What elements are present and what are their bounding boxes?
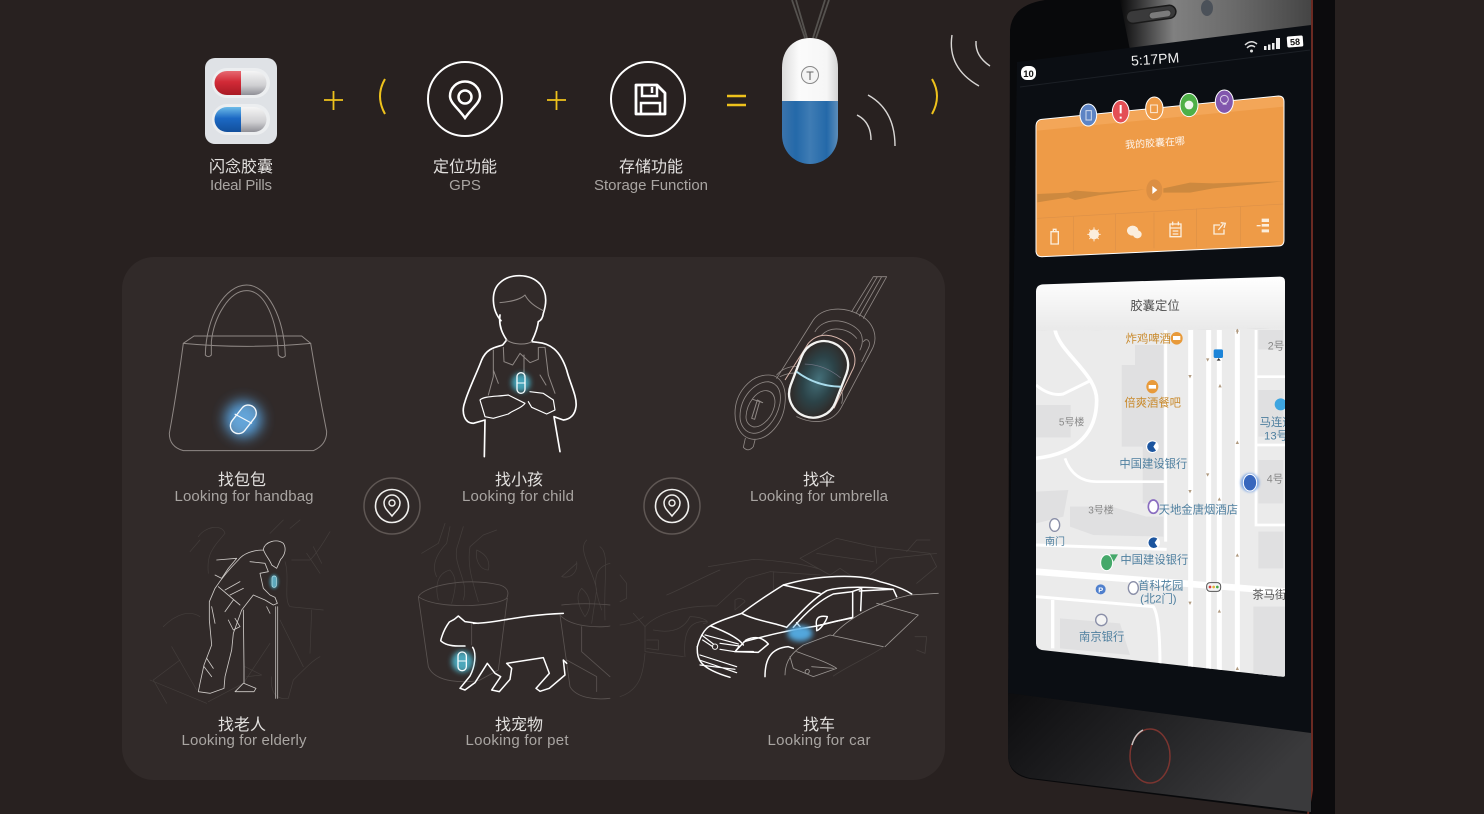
label: umbrella: 找伞 — [803, 471, 835, 489]
map base — [1036, 328, 1294, 678]
label: car: Looking for car — [768, 732, 870, 749]
map labels: 13号 — [1264, 429, 1288, 442]
icon: GPS circle — [428, 62, 502, 136]
label: GPS: GPS — [449, 177, 481, 194]
label: GPS: 定位功能 — [433, 158, 497, 176]
illustration: cat — [418, 523, 610, 699]
label: handbag: Looking for handbag — [174, 488, 314, 505]
label: handbag — [174, 471, 314, 505]
phone — [1008, 0, 1335, 814]
app card: capsule map — [1036, 277, 1294, 678]
label: child — [462, 471, 574, 505]
label: storage function — [594, 158, 708, 194]
map labels: 3号楼 — [1088, 503, 1114, 516]
location pin badge 2 — [644, 478, 700, 534]
map pins — [1050, 332, 1287, 626]
label: ideal pills — [209, 157, 273, 194]
label: pet: Looking for pet — [466, 732, 569, 749]
label: storage function: 存储功能 — [619, 158, 683, 176]
map labels: 倍爽酒餐吧 — [1124, 396, 1181, 410]
card heading: 我的胶囊在哪 — [1125, 134, 1185, 151]
status bar — [1020, 35, 1310, 87]
label: elderly: 找老人 — [218, 716, 266, 734]
label: car — [768, 716, 870, 749]
status bar: 5:17PM — [1130, 49, 1180, 69]
label: pet — [466, 716, 569, 749]
plus sign 2 — [547, 91, 566, 110]
status bar: 58 — [1290, 37, 1300, 47]
map labels: 茶马街 — [1252, 587, 1286, 601]
label: ideal pills: Ideal Pills — [210, 177, 272, 194]
bezel highlight — [1120, 0, 1311, 50]
app card: orange voice note — [1036, 90, 1284, 257]
map labels: 5号楼 — [1059, 416, 1084, 429]
label: handbag: 找包包 — [218, 471, 266, 489]
speaker and camera — [1125, 0, 1213, 24]
label: ideal pills: 闪念胶囊 — [209, 157, 273, 176]
signal waves upper — [951, 35, 990, 86]
phone side edge — [1308, 0, 1335, 814]
illustration: handbag — [169, 285, 327, 451]
label: umbrella: Looking for umbrella — [750, 488, 889, 505]
illustration: car — [620, 538, 938, 697]
label: elderly — [182, 716, 307, 749]
map labels: 4号 — [1267, 474, 1283, 486]
home button chin — [1008, 693, 1311, 812]
label: umbrella — [750, 471, 889, 505]
signal waves right — [857, 95, 895, 146]
home button — [1130, 729, 1170, 783]
map labels: 南门 — [1045, 535, 1065, 548]
location pin badge 1 — [364, 478, 420, 534]
label: GPS — [433, 158, 497, 194]
status bar: 10 — [1023, 69, 1034, 80]
map labels: 南京银行 — [1079, 630, 1124, 644]
label: elderly: Looking for elderly — [182, 732, 307, 749]
map labels: 中国建设银行 — [1120, 552, 1188, 566]
action icons — [1051, 219, 1269, 244]
play button — [1146, 179, 1162, 201]
map pins: P — [1098, 585, 1103, 594]
waveform — [1037, 181, 1283, 202]
plus sign 1 — [324, 91, 343, 110]
map header — [1036, 277, 1285, 331]
label: child: 找小孩 — [495, 471, 543, 489]
map labels: 中国建设银行 — [1119, 456, 1187, 470]
illustration: umbrella capsule — [735, 277, 887, 450]
label: car: 找车 — [803, 716, 835, 734]
device: capsule with cord — [782, 0, 838, 164]
formula row — [205, 0, 990, 194]
category bubbles — [1080, 90, 1233, 126]
map labels — [1045, 332, 1294, 644]
map labels: 天地金唐烟酒店 — [1159, 502, 1238, 516]
map labels: 炸鸡啤酒 — [1126, 332, 1171, 346]
map labels: 马连道 — [1260, 415, 1294, 429]
label: child: Looking for child — [462, 488, 574, 505]
panel: use cases — [122, 257, 945, 780]
current location marker — [1241, 473, 1259, 492]
icon: storage circle — [611, 62, 685, 136]
app card: capsule map: 胶囊定位 — [1130, 298, 1180, 313]
illustration: child — [463, 276, 576, 457]
phone body — [1008, 0, 1335, 814]
opening parenthesis — [380, 79, 385, 114]
label: storage function: Storage Function — [594, 177, 708, 194]
roads — [1036, 330, 1287, 677]
buildings — [1036, 330, 1285, 677]
closing parenthesis — [932, 79, 937, 114]
map labels: 首科花园 — [1138, 578, 1183, 592]
icon: pill blister pack — [205, 58, 277, 144]
map labels: (北2门) — [1140, 592, 1177, 606]
label: pet: 找宠物 — [495, 716, 543, 734]
road arrows — [1188, 328, 1239, 670]
map labels: 2号 — [1268, 340, 1284, 352]
screen — [1008, 25, 1311, 733]
equals sign — [727, 96, 746, 105]
illustration: elderly — [150, 520, 330, 703]
action grid lines — [1037, 204, 1283, 252]
